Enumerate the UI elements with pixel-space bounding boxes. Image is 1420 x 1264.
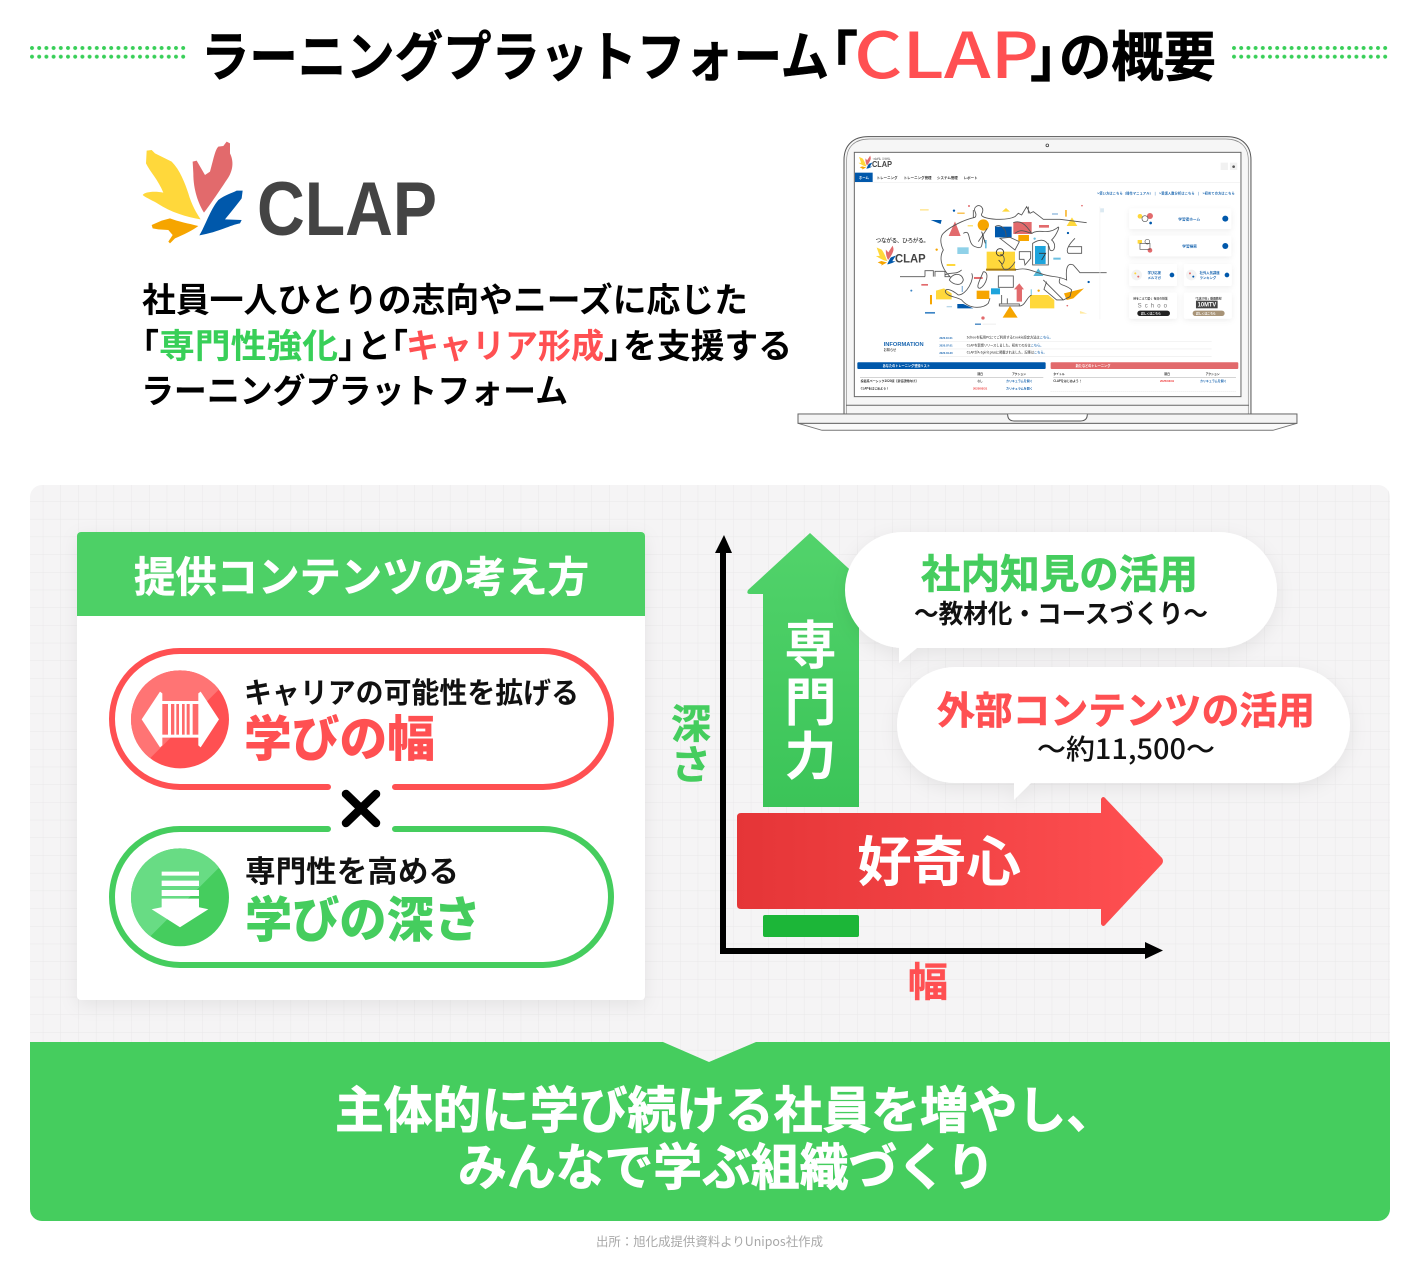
pill heading: 学びの深さ [245,881,481,952]
screen tables: カリキュラムを開く [1200,378,1227,383]
icon: double-headed arrow [130,670,229,768]
screen tables: アクション [1012,372,1026,376]
screen information: CLAPを新規リリースしました。初めての方はこちら。 [967,342,1043,347]
speech bubble: internal knowledge: ～教材化・コースづくり～ [914,594,1208,631]
axis label depth: さ [671,733,711,791]
chart: depth and breadth [671,532,1350,1008]
logo leaves [143,142,243,243]
description line 2: 「 [125,319,159,368]
screen tables [857,362,1238,391]
screen information: 2020.10.01 [939,336,953,340]
screen nav: ホーム [859,175,870,180]
description line 2: を支援する [623,319,792,368]
description line 2: 」 [604,319,638,368]
title close bracket: 」 [1030,13,1084,92]
coloured shapes [910,205,1090,325]
icon: down arrow [130,848,229,946]
screen tables: 新たなどのトレーニング [1076,363,1111,368]
screen information: Schooを転用PCにてご利用するCookie設定方法はこちら。 [967,335,1053,340]
laptop base [798,423,1297,430]
banner line 2: みんなで学ぶ組織づくり [458,1128,995,1200]
screen tables: 期日 [1164,372,1170,376]
pill subtitle: 専門性を高める [245,847,459,891]
CLAP logo [143,142,437,252]
card heading [77,532,645,616]
y axis arrow [715,535,1163,959]
card heading: 提供コンテンツの考え方 [134,544,589,605]
speech bubble: internal knowledge: 社内知見の活用 [921,542,1198,600]
conclusion banner [30,1042,1390,1221]
axis label breadth: 幅 [908,950,948,1008]
screen [854,152,1241,397]
screen nav: トレーニング [877,175,898,181]
screen side buttons: 学び応援 [1148,270,1162,275]
screen side buttons: 「1話10分」動画教材 [1194,296,1222,300]
screen side buttons: ランキング [1200,275,1217,280]
pill heading: 学びの幅 [244,700,435,771]
title text katakana: ラーニングプラットフォーム [201,13,829,92]
screen nav [855,173,1240,182]
green arrow: expertise: 専 [784,604,837,679]
screen tables: アクション [1206,372,1220,376]
screen side buttons: Schoo [1138,303,1168,309]
screen information: お知らせ [884,347,896,352]
screen tables: 期日 [977,372,983,376]
screen hero slogan and logo [876,235,929,266]
screen side buttons: 学習検索 [1182,244,1197,250]
screen header logo: CLAP [872,159,892,169]
screen header logo [858,156,1237,170]
screen information: 2020.04.20 [939,351,953,355]
screen side buttons: 詳しくはこちら [1141,312,1161,316]
screen nav: トレーニング管理 [904,175,932,181]
title text suffix: の概要 [1059,13,1216,92]
red pill: breadth of learning [112,651,611,787]
laptop body [844,137,1251,414]
screen side buttons: 詳しくはこちら [1196,312,1216,316]
title dotted line left [30,46,186,59]
screen hero slogan and logo: CLAP [895,251,926,265]
main panel background [30,485,1390,1221]
screen nav: レポート [964,175,978,181]
source note: 出所：旭化成提供資料よりUnipos社作成 [596,1231,823,1250]
pill subtitle: キャリアの可能性を拡げる [244,670,579,712]
icon: multiply sign [346,794,376,823]
screen side buttons: 社外人気講座 [1200,270,1220,275]
screen information [884,335,1212,357]
screen side buttons: 10MTV [1198,303,1216,309]
speech bubble: external content: ～約11,500～ [1037,728,1215,768]
screen tables: CLAPをはじめよう！ [861,386,889,391]
line drawing [900,206,1107,307]
speech bubble: external content: 外部コンテンツの活用 [937,680,1315,735]
description line 2 [125,319,792,368]
screen information: INFORMATION [884,342,924,348]
screen links: >使い方はこちら（操作マニュアル） | >受講人数分析はこちら | >初めての方はこちら [1097,191,1235,196]
green pill: depth of learning [112,829,611,965]
green arrow: expertise [747,533,873,937]
green arrow: expertise: 力 [784,715,837,790]
title [30,6,1389,97]
speech bubble: internal knowledge [845,532,1277,663]
description line 1: 社員一人ひとりの志向やニーズに応じた [142,273,748,322]
red arrow: curiosity: 好奇心 [857,818,1021,897]
description line 2: 「 [374,319,408,368]
screen tables: 投稿系ベーシック2020版【新任研修向け】 [861,378,918,383]
screen information: CLAPがA-Spirit plusに掲載されました。記事はこちら。 [967,350,1047,355]
screen side buttons [1129,208,1232,319]
panel: content approach card [77,532,645,1000]
title text CLAP: CLAP [854,6,1039,97]
laptop with CLAP portal screenshot [798,137,1297,430]
logo wordmark: CLAP [257,167,437,252]
screen information: 2020.07.01 [939,343,953,347]
description line 3: ラーニングプラットフォーム [141,364,568,413]
screen side buttons: 学習者ホーム [1178,216,1200,222]
screen tables: あなたのトレーニング登録リスト [883,363,930,368]
description line 2: と [357,319,391,368]
description line 2: 専門性強化 [159,319,338,368]
screen tables: CLAPをはじめよう！ [1053,378,1082,383]
title open bracket: 「 [804,13,858,92]
description text [125,273,792,413]
red arrow: curiosity [737,797,1163,926]
screen side buttons: 時をこえて届く 毎日の授業 [1133,296,1168,300]
screen tables: カリキュラムを開く [1006,386,1033,391]
screen tables: なし [977,379,983,383]
speech bubble: external content [897,667,1350,800]
screen nav: システム管理 [937,175,958,181]
description line 2: キャリア形成 [406,319,604,368]
screen hero slogan and logo: つながる、ひろがる。 [876,235,929,244]
title dotted line right [1232,46,1389,59]
axis label depth: 深 [671,692,711,750]
screen side buttons: メルマガ [1148,275,1162,280]
screen tables: カリキュラムを開く [1006,378,1033,383]
screen header logo: つながる、ひろがる。 [873,157,892,161]
screen tables: タイトル [1053,372,1065,376]
screen tables: 2025/03/31 [973,387,988,391]
screen hero illustration [900,205,1107,325]
green arrow: expertise: 門 [784,661,837,736]
banner line 1: 主体的に学び続ける社員を増やし、 [335,1071,1115,1143]
screen tables: 2025/03/31 [1160,379,1175,383]
description line 2: 」 [338,319,372,368]
